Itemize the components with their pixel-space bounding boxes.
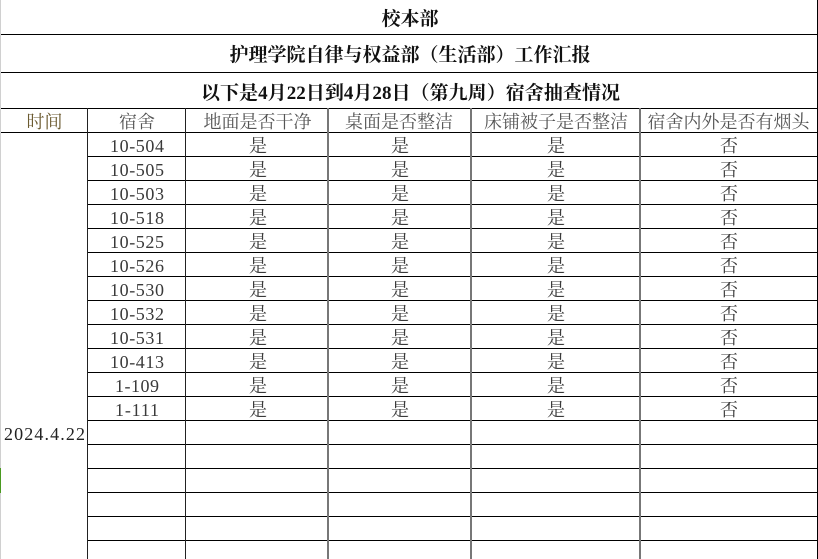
cigarette butts column: 否 [720,304,738,324]
cigarette butts column: 否 [720,232,738,252]
desk tidy column: 是 [391,280,409,300]
desk tidy column: 是 [391,136,409,156]
cigarette butts column: 否 [720,376,738,396]
bedding tidy column: 是 [547,352,565,372]
cigarette butts column: 否 [720,352,738,372]
cigarette butts column: 否 [720,184,738,204]
title: work report: 护理学院自律与权益部（生活部）工作汇报 [229,43,591,66]
dormitory number column: 1-109 [115,376,159,396]
floor clean column: 是 [249,184,267,204]
bedding tidy column: 是 [547,184,565,204]
bedding tidy column: 是 [547,160,565,180]
floor clean column: 是 [249,352,267,372]
cigarette butts column: 否 [720,136,738,156]
desk tidy column: 是 [391,256,409,276]
bedding tidy column: 是 [547,304,565,324]
bedding tidy column: 是 [547,136,565,156]
floor clean column: 是 [249,136,267,156]
bedding tidy column: 是 [547,208,565,228]
date cell: 2024.4.22 [4,424,85,444]
desk tidy column: 是 [391,352,409,372]
floor clean column: 是 [249,232,267,252]
dormitory number column [110,136,164,420]
dormitory number column: 10-532 [110,304,164,324]
dormitory number column: 1-111 [115,400,159,420]
desk tidy column: 是 [391,304,409,324]
table header row: 桌面是否整洁 [345,112,453,132]
table header row: 时间 [26,112,62,132]
desk tidy column: 是 [391,232,409,252]
dormitory number column: 10-526 [110,256,164,276]
table header row: 宿舍 [119,112,155,132]
bedding tidy column: 是 [547,400,565,420]
dormitory number column: 10-530 [110,280,164,300]
desk tidy column: 是 [391,376,409,396]
floor clean column: 是 [249,280,267,300]
cigarette butts column [720,136,738,420]
table header row: 地面是否干净 [204,112,312,132]
floor clean column: 是 [249,400,267,420]
table header row [26,112,810,132]
desk tidy column: 是 [391,400,409,420]
subtitle: inspection period: 以下是4月22日到4月28日（第九周）宿舍抽查情况 [201,81,620,104]
bedding tidy column: 是 [547,256,565,276]
table header row: 宿舍内外是否有烟头 [648,112,810,132]
floor clean column: 是 [249,160,267,180]
floor clean column: 是 [249,208,267,228]
dormitory number column: 10-504 [110,136,164,156]
cigarette butts column: 否 [720,160,738,180]
cigarette butts column: 否 [720,328,738,348]
floor clean column: 是 [249,328,267,348]
desk tidy column: 是 [391,208,409,228]
desk tidy column: 是 [391,160,409,180]
dormitory number column: 10-531 [110,328,164,348]
dormitory number column: 10-505 [110,160,164,180]
cigarette butts column: 否 [720,208,738,228]
cigarette butts column: 否 [720,256,738,276]
title: school campus: 校本部 [381,8,439,30]
desk tidy column [391,136,409,420]
desk tidy column: 是 [391,328,409,348]
bedding tidy column: 是 [547,376,565,396]
table header row: 床铺被子是否整洁 [484,112,628,132]
dormitory number column: 10-525 [110,232,164,252]
bedding tidy column: 是 [547,232,565,252]
floor clean column: 是 [249,256,267,276]
cigarette butts column: 否 [720,400,738,420]
cigarette butts column: 否 [720,280,738,300]
bedding tidy column [547,136,565,420]
bedding tidy column: 是 [547,328,565,348]
desk tidy column: 是 [391,184,409,204]
bedding tidy column: 是 [547,280,565,300]
dormitory number column: 10-413 [110,352,164,372]
floor clean column: 是 [249,376,267,396]
floor clean column: 是 [249,304,267,324]
dormitory number column: 10-518 [110,208,164,228]
floor clean column [249,136,267,420]
dormitory number column: 10-503 [110,184,164,204]
